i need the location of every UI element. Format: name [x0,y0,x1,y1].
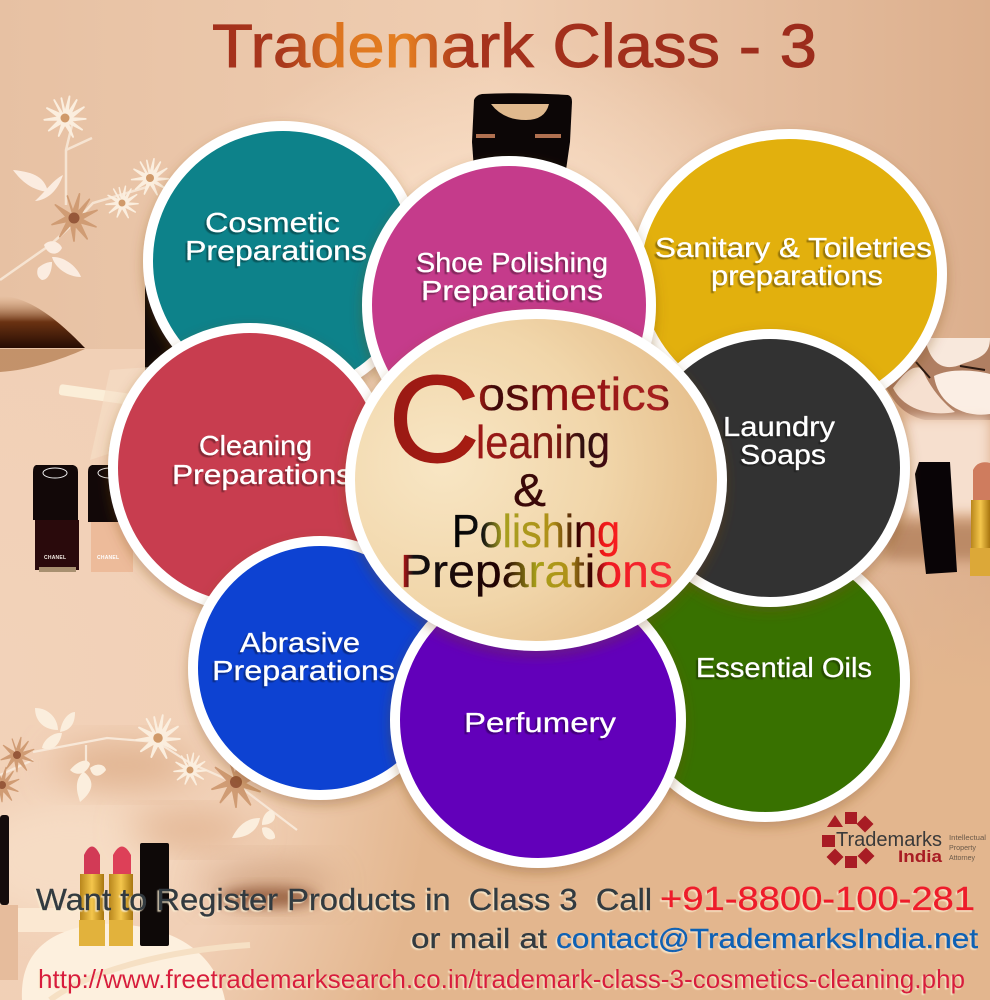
icon: black lipstick tube right [915,462,957,574]
icon: gold lipstick right [970,462,990,576]
label: cosmetic preparations: Cosmetic [205,207,340,238]
footer: call to action line [36,880,975,917]
logo: Trademarks India: Trademarks [836,829,942,851]
central heading text: Polishing [452,505,620,557]
label: shoe polishing [416,247,608,306]
footer: email line: contact@TrademarksIndia.net [556,923,978,954]
central heading text: Preparations [400,545,673,597]
logo: Trademarks India: Intellectual [949,835,986,842]
icon: white flower right side [885,338,990,420]
label: cosmetic preparations [185,207,367,266]
logo: Trademarks India: India [898,847,943,866]
icon: dark compact bottom left [0,815,9,905]
footer: website url: http://www.freetrademarksearch.co.in/trademark-class-3-cosmetics-cleaning.php [38,964,965,994]
central heading text [388,351,673,597]
icon: flower branch bottom left [0,708,297,840]
logo: Trademarks India [822,812,986,868]
panel: central circle [350,314,722,646]
icon: compact case [472,93,572,170]
label: cosmetic preparations: Preparations [185,235,367,266]
panel: essential oils [625,543,905,817]
logo: Trademarks India: Property [949,845,976,852]
background: dark shadow on wall [0,296,85,372]
central heading text: osmetics [478,368,670,420]
footer: call to action line: Want to Register Products in Class 3 Call [36,882,652,917]
label: cleaning preparations [172,430,352,490]
label: laundry soaps [723,411,835,470]
logo: Trademarks India: Attorney [949,855,975,862]
label: abrasive preparations [212,627,395,686]
central heading text: leaning [476,416,610,468]
icon: nude nail polish [88,465,133,572]
label: cleaning preparations: Preparations [172,459,352,490]
label: abrasive preparations: Preparations [212,655,395,686]
panel: laundry soaps [635,334,905,602]
footer: email line [411,923,978,954]
central heading text: & [513,464,546,516]
panel: cosmetic preparations [148,126,418,396]
label: sanitary and toiletries: preparations [711,260,883,291]
label: cleaning preparations: Cleaning [199,430,312,461]
label: sanitary and toiletries: Sanitary & Toiletries [655,232,932,263]
icon: dark nail polish [33,465,79,572]
panel: shoe polishing [367,161,651,449]
background: pale brush on table [58,365,175,460]
label: perfumery: Perfumery [464,707,616,738]
icon: logo mark [822,812,874,868]
background: pale wall right side [905,418,990,513]
footer: call to action line: +91-8800-100-281 [660,880,975,917]
panel: sanitary and toiletries [636,134,942,414]
panel: abrasive preparations [193,541,447,795]
background: shadow behind footer text [203,865,333,907]
background: shadow at right lipstick base [885,522,990,560]
icon: flower branch top left [0,96,168,280]
label: laundry soaps: Laundry [723,411,835,442]
label: shoe polishing: Preparations [421,275,603,306]
icon: black bottle behind circles [145,282,175,372]
panel: perfumery [395,577,681,863]
icon: nude nail polish: CHANEL [97,555,119,561]
central heading text: C [388,351,480,489]
panel: cleaning preparations [113,328,387,608]
label: laundry soaps: Soaps [740,439,826,470]
background: cream platform bottom left [0,905,250,1000]
icon: two pink lipsticks [79,846,133,946]
label: sanitary and toiletries [655,232,932,291]
icon: dark nail polish: CHANEL [44,555,66,561]
label: abrasive preparations: Abrasive [240,627,360,658]
title: Trademark Class - 3 [212,12,817,80]
label: shoe polishing: Shoe Polishing [416,247,608,278]
icon: black lipstick tube [140,843,169,946]
label: essential oils: Essential Oils [696,652,872,683]
footer: email line: or mail at [411,923,547,954]
